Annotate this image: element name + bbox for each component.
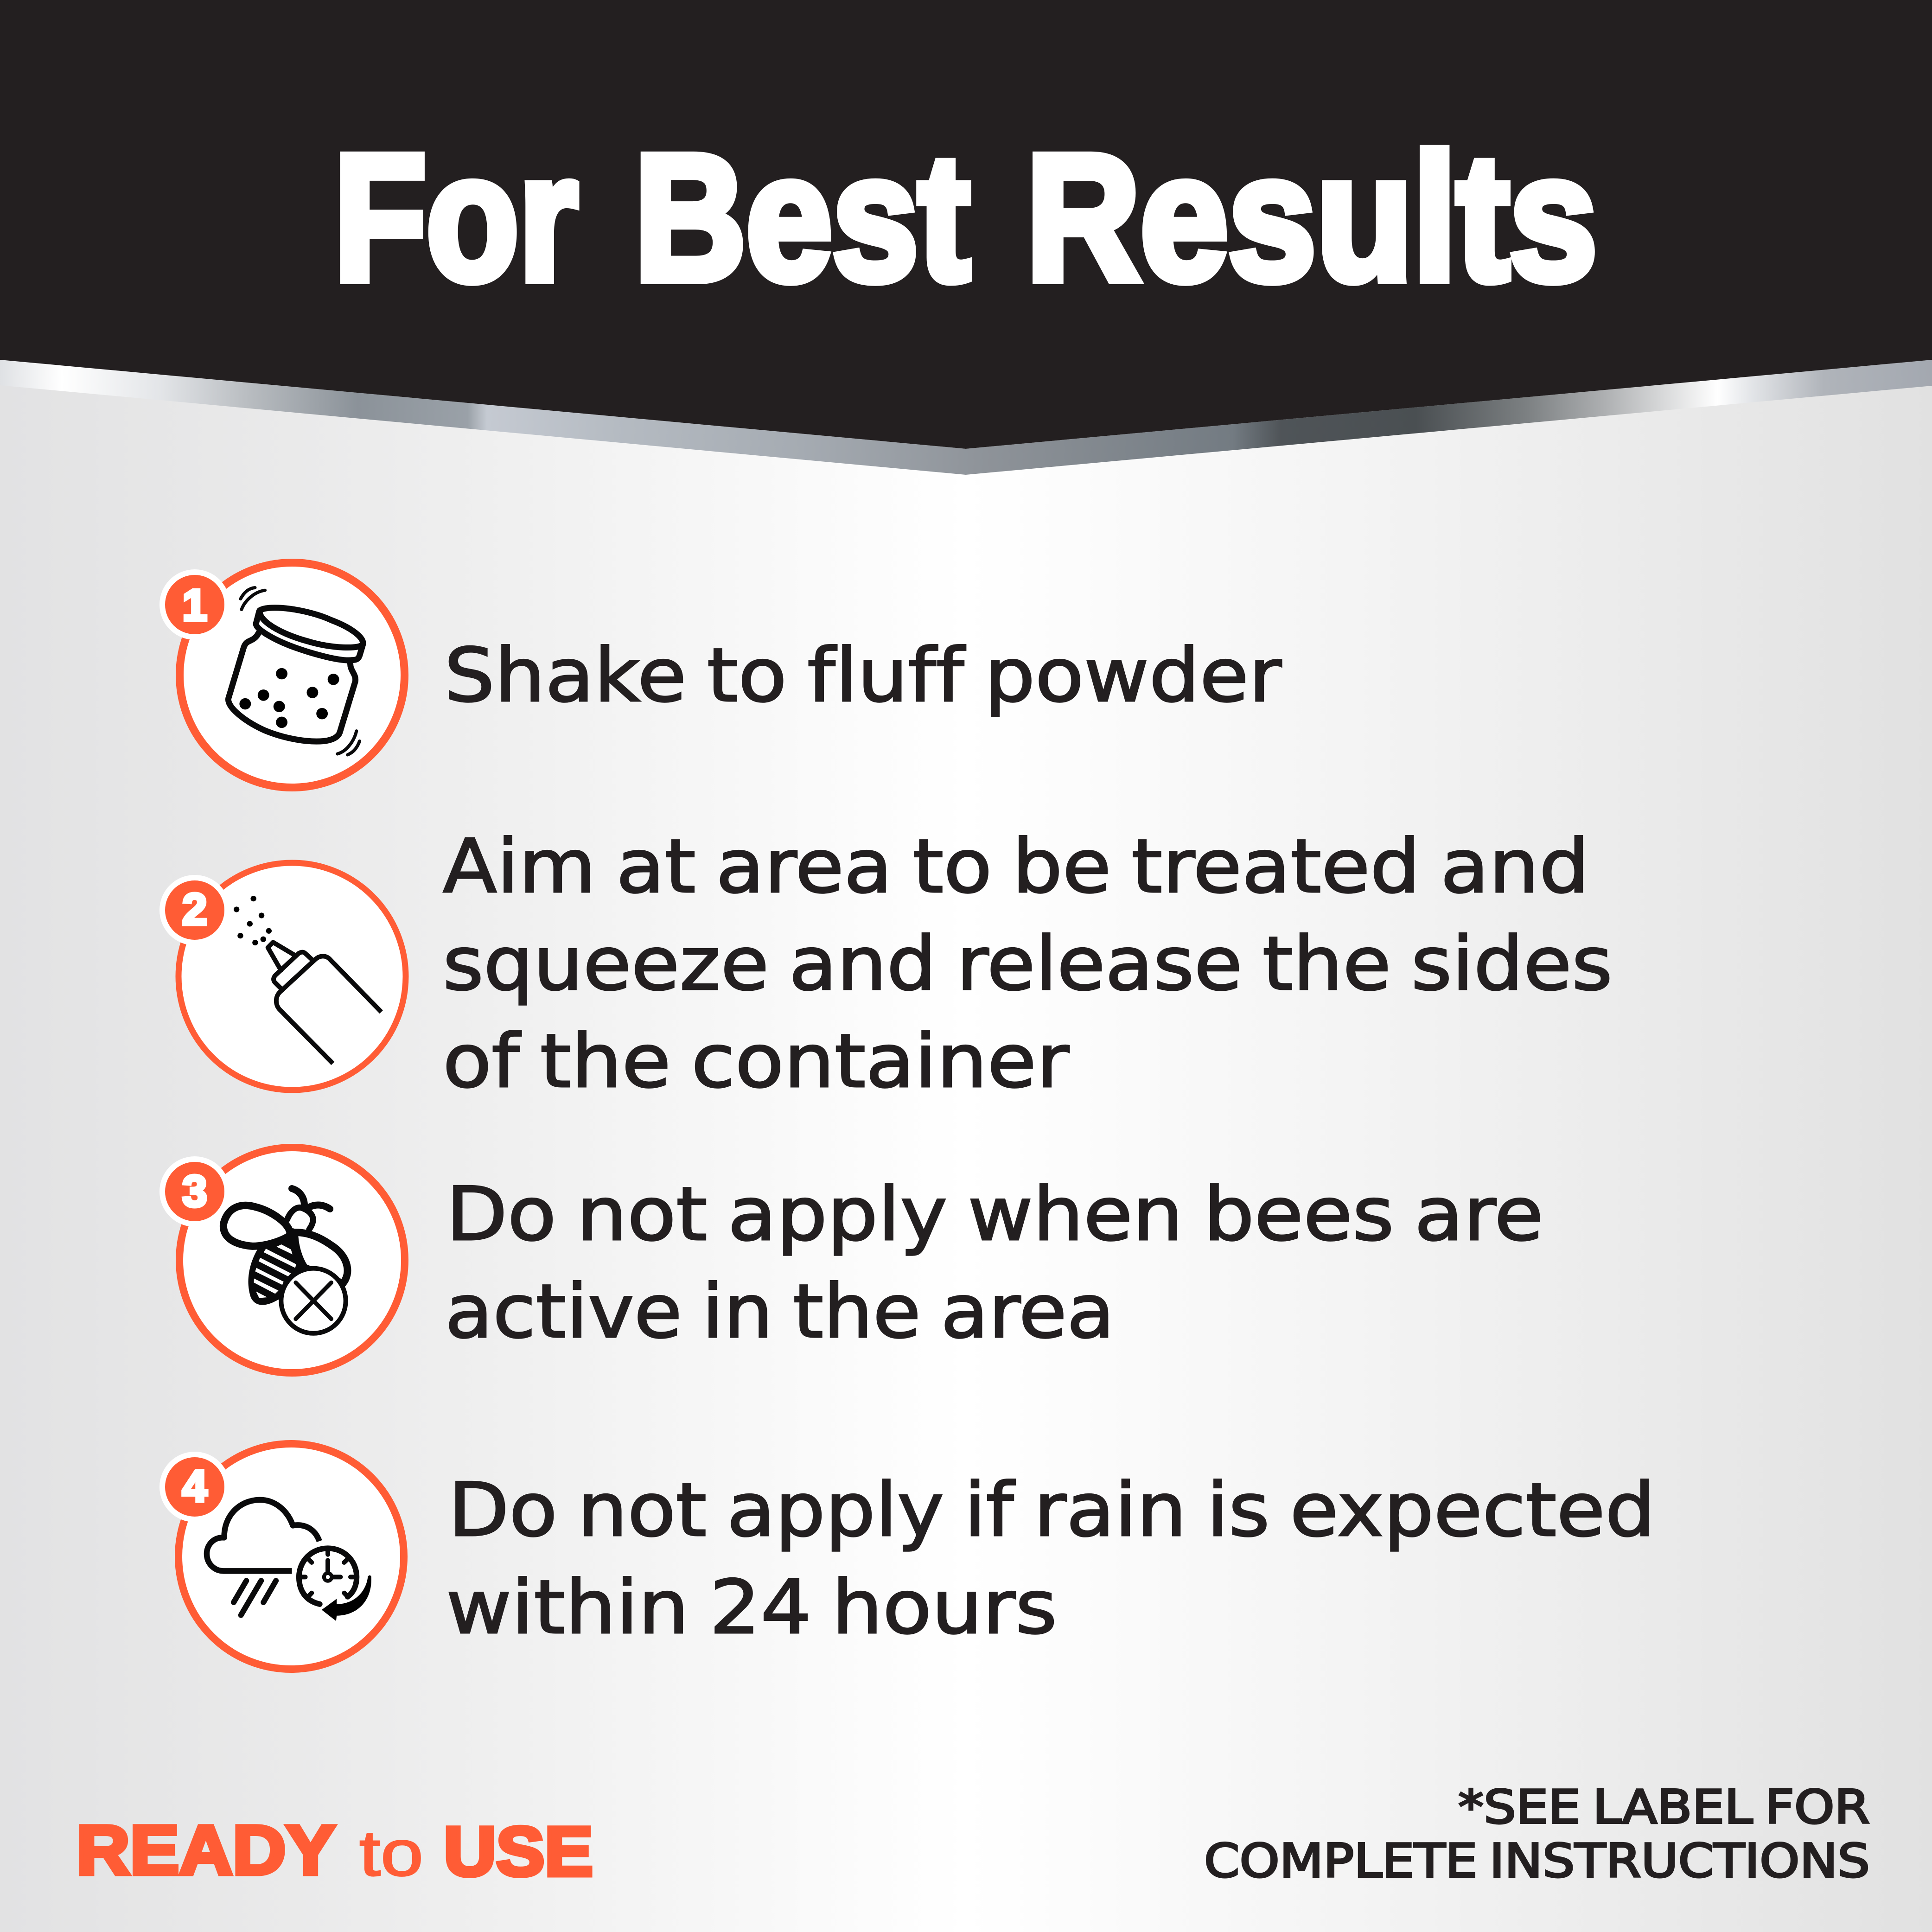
step 4 text [446,1467,1655,1651]
icon: bee with cross [223,1188,347,1333]
icon circle 1 [180,563,404,787]
step 3 text [445,1171,1543,1355]
step 3 text: active in the area [445,1268,1115,1355]
ready to use tagline [77,1811,593,1890]
icon circle 3 [179,1148,405,1373]
icon: squeeze bottle [234,896,381,1064]
icon: rain cloud and clock [207,1500,371,1621]
title: Best [634,118,970,318]
step 2 text [443,823,1613,1104]
icon: shaking jar [228,587,363,755]
step 4 text: Do not apply if rain is expected [448,1467,1655,1553]
number badge 3: 3 [182,1167,207,1216]
metallic chevron band [0,360,1932,475]
step 2 text: of the container [443,1018,1069,1104]
title [334,118,1597,318]
number badge 1 [159,569,230,640]
number badge 3 [159,1156,230,1227]
dark header shape [0,0,1932,449]
number badge 4 [159,1452,230,1522]
number badge 2 [159,875,230,945]
ready to use tagline: READY [77,1811,335,1889]
footnote: *SEE LABEL FOR [1458,1780,1870,1834]
number badge 1: 1 [182,580,207,630]
step 1 text: Shake to fluff powder [444,632,1282,719]
title: For [334,118,578,318]
step 2 text: squeeze and release the sides [443,920,1613,1007]
step 2 text: Aim at area to be treated and [443,823,1589,910]
step 2 panel [159,823,1613,1104]
icon circle 4 [179,1444,404,1669]
icon circle 2 [179,863,406,1090]
title: Results [1026,118,1597,318]
footnote [1204,1780,1870,1888]
ready to use tagline: to [359,1817,423,1889]
number badge 2: 2 [182,885,207,934]
step 4 text: within 24 hours [446,1564,1057,1651]
number badge 4: 4 [182,1461,207,1511]
header banner [0,0,1932,475]
footnote: COMPLETE INSTRUCTIONS [1204,1834,1870,1888]
ready to use tagline: USE [444,1812,593,1890]
step 3 panel [159,1148,1543,1373]
step 3 text: Do not apply when bees are [446,1171,1543,1257]
step 1 panel [159,563,1282,787]
step 4 panel [159,1444,1655,1669]
